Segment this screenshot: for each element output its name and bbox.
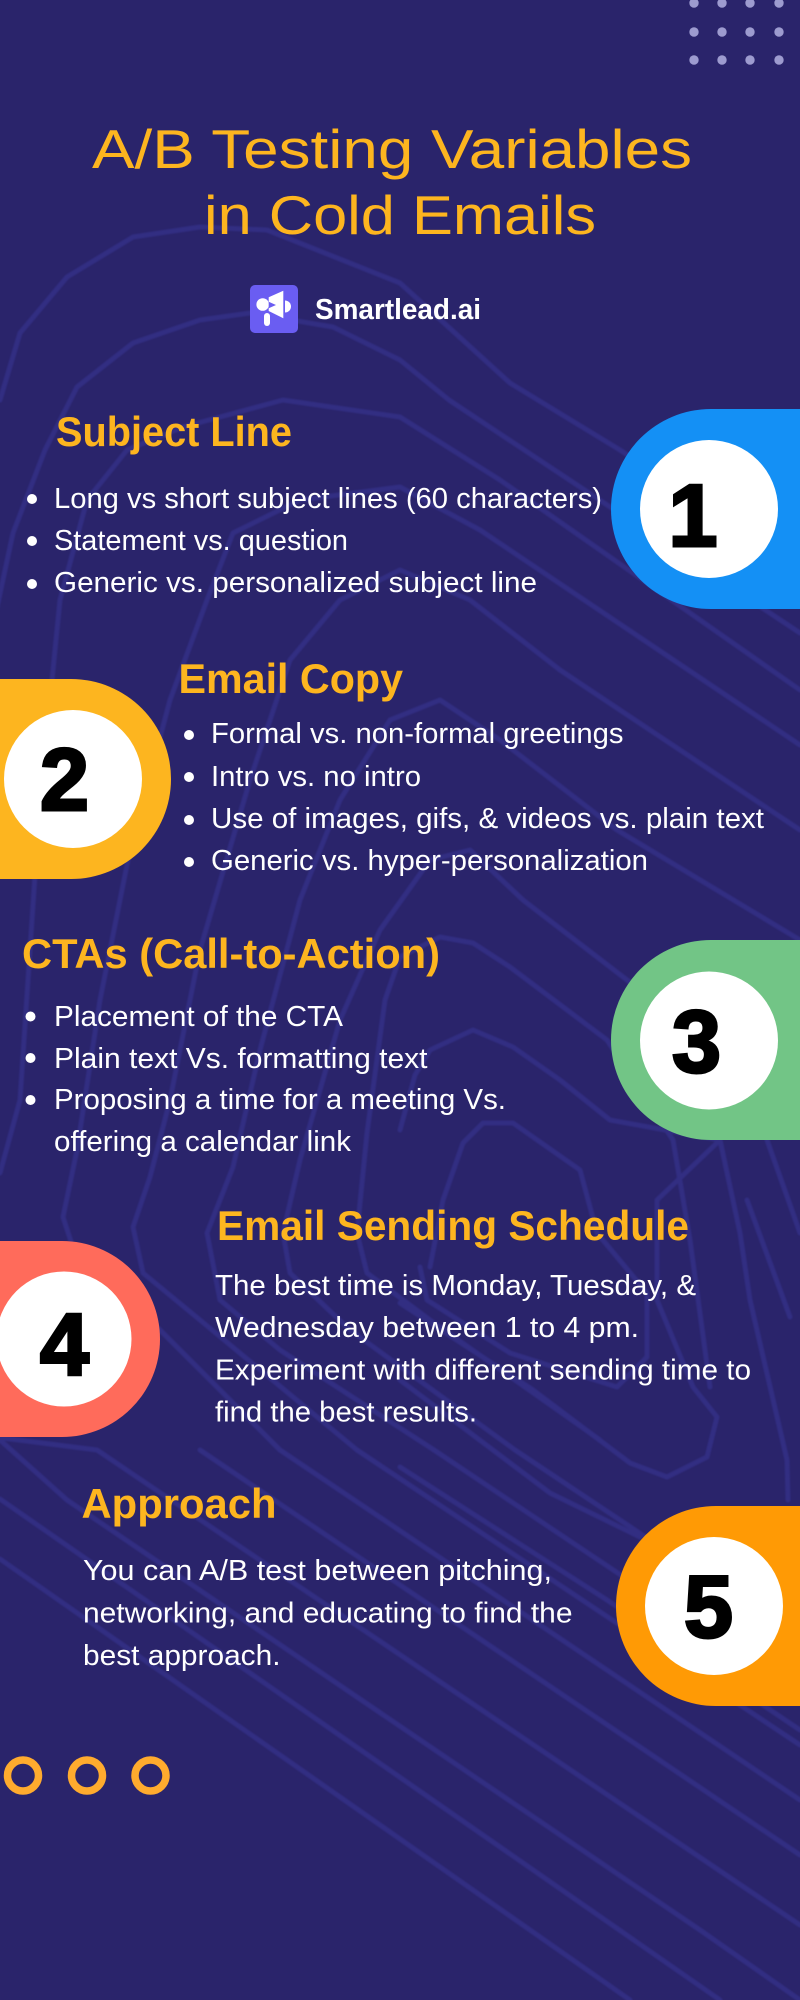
- number badge 1: 1: [669, 466, 717, 565]
- bullet list: Placement of the CTA: [54, 1001, 344, 1033]
- body text: best approach.: [83, 1640, 280, 1672]
- number badge 5: [616, 1506, 800, 1706]
- number badge 2: [0, 679, 171, 879]
- panel: approach: [82, 1480, 800, 1706]
- heading: Email Copy: [178, 655, 404, 702]
- bullet list: Proposing a time for a meeting Vs.: [54, 1084, 506, 1116]
- number badge 2: 2: [40, 730, 89, 829]
- brand name: Smartlead.ai: [315, 294, 481, 326]
- title: in Cold Emails: [204, 184, 596, 246]
- body text: The best time is Monday, Tuesday, &: [215, 1270, 696, 1302]
- title: A/B Testing Variables: [92, 118, 692, 180]
- number badge 3: 3: [672, 992, 721, 1091]
- body text: find the best results.: [215, 1396, 477, 1428]
- body text: [83, 1555, 572, 1672]
- number badge 1: [611, 409, 800, 609]
- icon: megaphone: [250, 285, 298, 333]
- bullet list: Statement vs. question: [54, 525, 348, 557]
- body text: networking, and educating to find the: [83, 1598, 572, 1630]
- bullet list: [26, 1001, 506, 1158]
- number badge 4: 4: [40, 1295, 89, 1394]
- number badge 5: 5: [684, 1557, 733, 1656]
- heading: Email Sending Schedule: [217, 1202, 689, 1249]
- bullet list: Use of images, gifs, & videos vs. plain text: [211, 803, 764, 835]
- logo: Smartlead.ai: [250, 285, 481, 333]
- body text: You can A/B test between pitching,: [83, 1555, 552, 1587]
- bullet list: Formal vs. non-formal greetings: [211, 718, 624, 750]
- panel: email copy: [0, 655, 764, 879]
- bullet list: [184, 718, 764, 877]
- number badge 3: [611, 940, 800, 1140]
- panel: CTAs: [22, 930, 800, 1158]
- body text: [215, 1270, 751, 1428]
- heading: CTAs (Call-to-Action): [22, 930, 440, 977]
- panel: subject line: [27, 408, 800, 609]
- panel: email sending schedule: [0, 1202, 751, 1437]
- heading: Subject Line: [56, 408, 292, 455]
- bullet list: offering a calendar link: [54, 1126, 352, 1158]
- decorative rings: [8, 1760, 166, 1791]
- bullet list: Plain text Vs. formatting text: [54, 1043, 427, 1075]
- number badge 4: [0, 1241, 160, 1437]
- bullet list: Long vs short subject lines (60 characters): [54, 483, 602, 515]
- bullet list: [27, 483, 602, 599]
- bullet list: Generic vs. hyper-personalization: [211, 845, 648, 877]
- body text: Wednesday between 1 to 4 pm.: [215, 1312, 639, 1344]
- body text: Experiment with different sending time to: [215, 1354, 751, 1386]
- decorative dot grid: [689, 0, 784, 65]
- heading: Approach: [82, 1480, 276, 1527]
- bullet list: Intro vs. no intro: [211, 761, 421, 793]
- bullet list: Generic vs. personalized subject line: [54, 567, 537, 599]
- title: [92, 118, 692, 246]
